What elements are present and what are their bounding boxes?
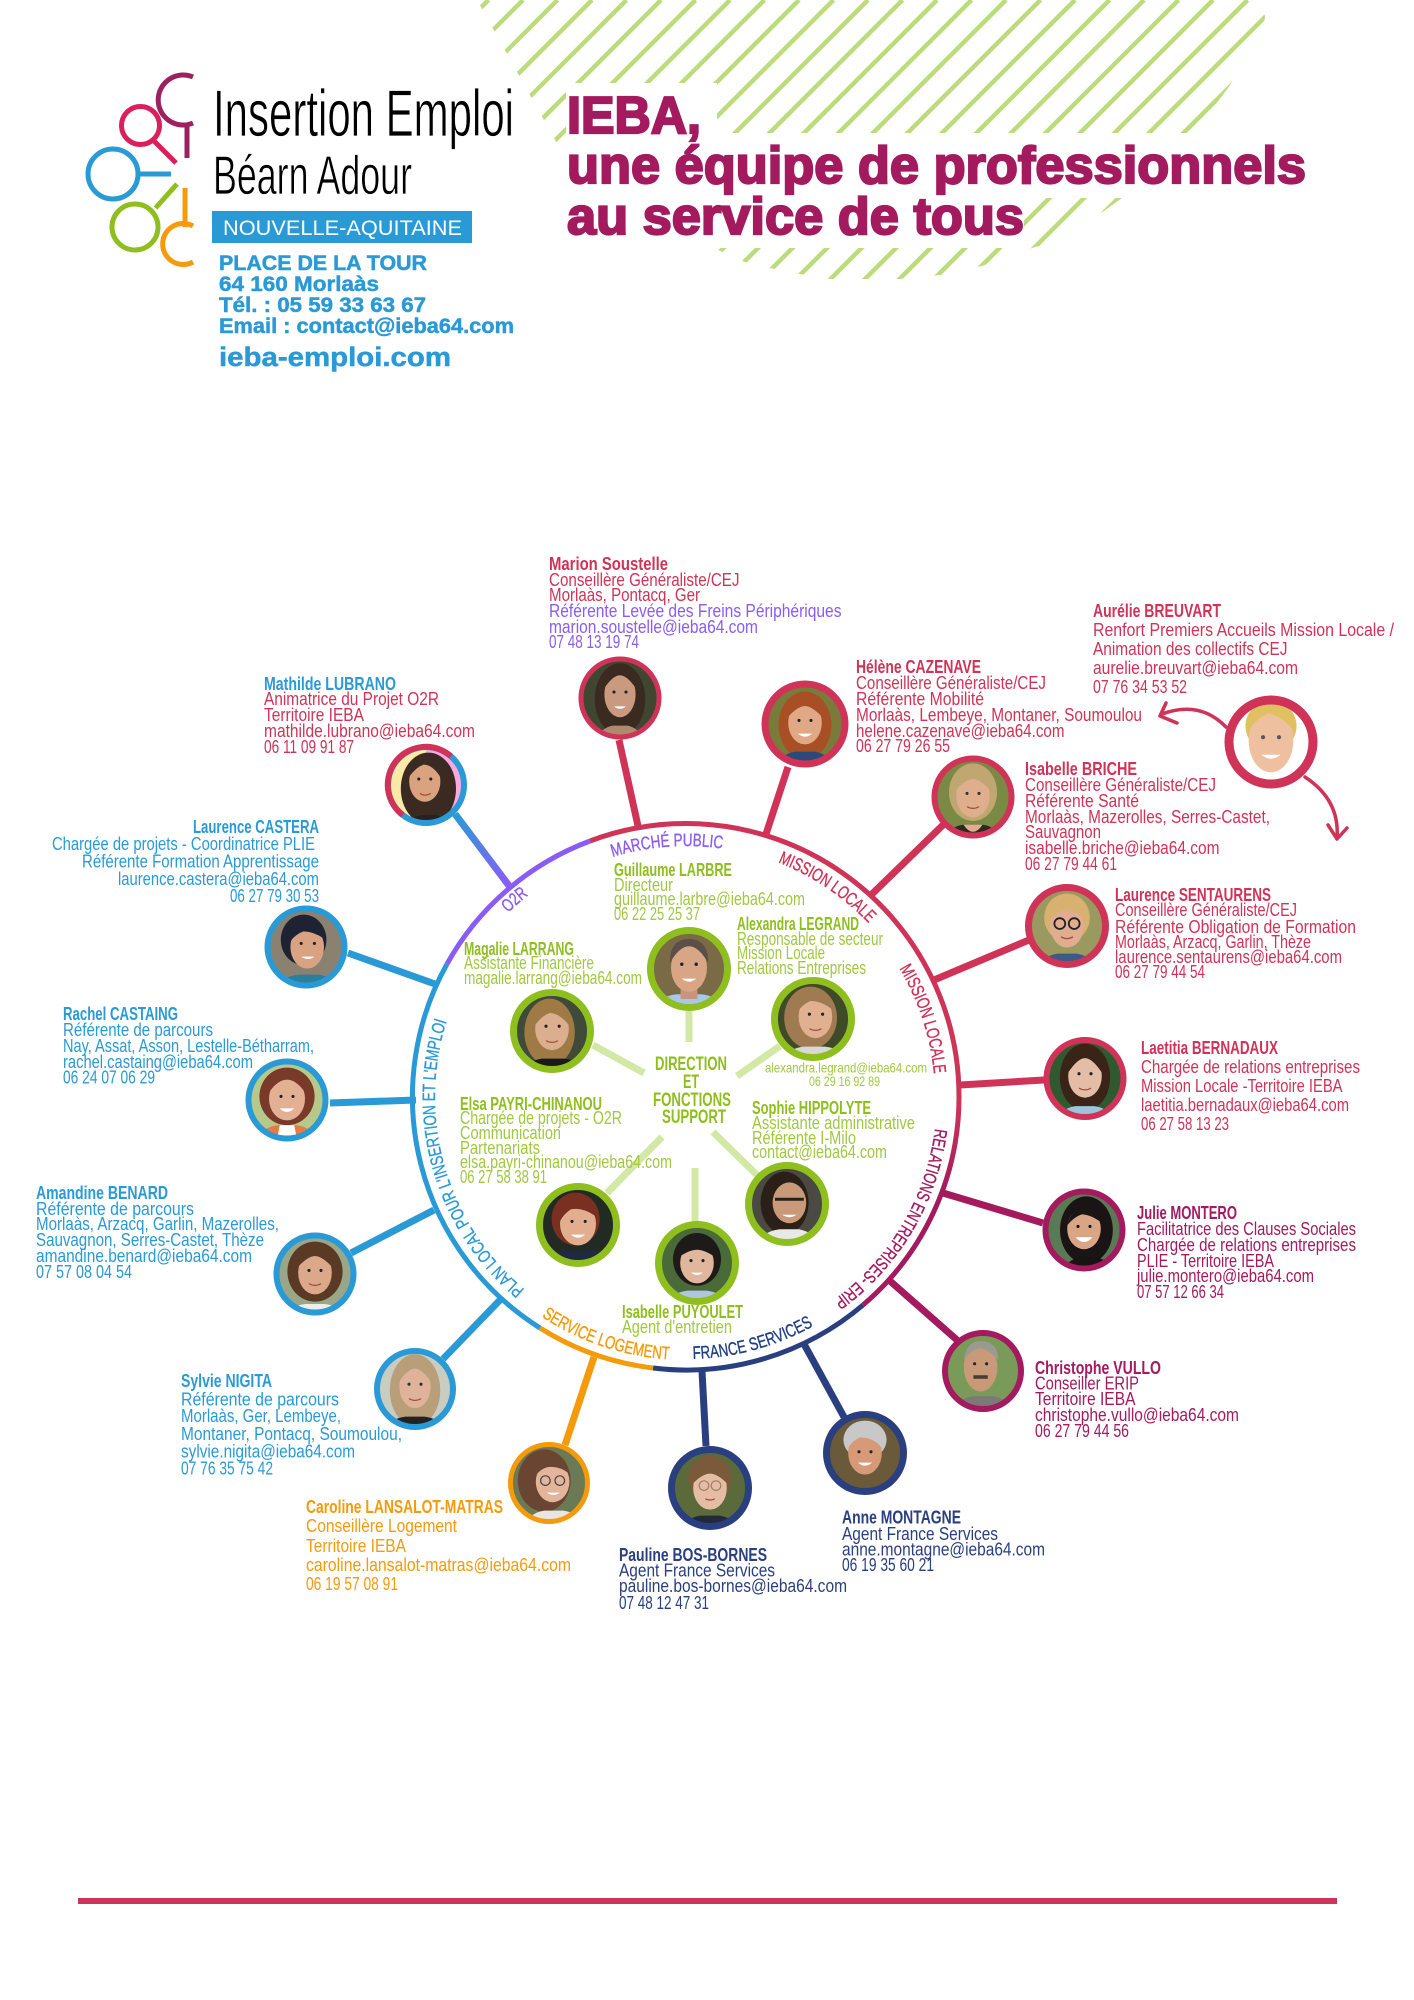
details: Laurence Sentaurens: Conseillère Généraliste/CEJ	[1115, 900, 1297, 920]
details: Julie Montero: julie.montero@ieba64.com	[1136, 1266, 1314, 1286]
photo: Amandine Benard	[274, 1232, 356, 1316]
details: Julie Montero: 07 57 12 66 34	[1137, 1282, 1224, 1302]
details: Isabelle Briche	[1025, 759, 1270, 874]
details: Marion Soustelle: Marion Soustelle	[549, 554, 668, 574]
details: Guillaume Larbre: guillaume.larbre@ieba64.com	[614, 889, 805, 909]
details: Alexandra Legrand	[737, 914, 927, 1089]
details: Isabelle Briche: Sauvagnon	[1025, 822, 1101, 842]
details: Laurence Castera: Laurence CASTERA	[193, 817, 319, 837]
details: Laurence Sentaurens	[1115, 885, 1356, 982]
details: Laetitia Bernadaux: Chargée de relations entreprises	[1141, 1057, 1360, 1077]
person: Rachel Castaing	[63, 1004, 335, 1149]
details: Elsa Payri-Chinanou: elsa.payri-chinanou@ieba64.com	[460, 1152, 672, 1172]
photo: Mathilde Lubrano	[384, 744, 467, 826]
details: Caroline Lansalot-Matras: caroline.lansalot-matras@ieba64.com	[306, 1555, 571, 1575]
photo: Sophie Hippolyte	[745, 1162, 829, 1246]
details: Guillaume Larbre: Directeur	[614, 875, 673, 895]
contact address: Email : contact@ieba64.com	[219, 315, 514, 338]
details: Elsa Payri-Chinanou: Chargée de projets - O2R	[460, 1108, 622, 1128]
details: Guillaume Larbre: Guillaume LARBRE	[614, 860, 732, 880]
details: Sophie Hippolyte: Référente I-Milo	[752, 1128, 856, 1148]
person: Caroline Lansalot-Matras	[306, 1436, 597, 1594]
details: Anne Montagne	[842, 1508, 1045, 1575]
details: Christophe Vullo: 06 27 79 44 56	[1035, 1421, 1129, 1441]
person: Amandine Benard	[36, 1183, 363, 1323]
details: Isabelle Briche: Isabelle BRICHE	[1025, 759, 1137, 779]
details: Laetitia Bernadaux: laetitia.bernadaux@ieba64.com	[1141, 1095, 1349, 1115]
details: Christophe Vullo: Christophe VULLO	[1035, 1358, 1161, 1378]
details: Isabelle Puyoulet: Isabelle PUYOULET	[622, 1302, 743, 1322]
person: Alexandra Legrand	[737, 914, 927, 1089]
title	[567, 87, 1306, 246]
details: Hélène Cazenave: Conseillère Généraliste/CEJ	[856, 673, 1046, 693]
details: Laetitia Bernadaux: Mission Locale -Territoire IEBA	[1141, 1076, 1342, 1096]
details: Isabelle Briche: Référente Santé	[1025, 791, 1139, 811]
title: IEBA,	[567, 87, 701, 145]
photo: Hélène Cazenave	[757, 677, 853, 773]
photo: Alexandra Legrand	[771, 977, 855, 1061]
details: Alexandra Legrand: alexandra.legrand@ieba64.com	[765, 1060, 927, 1076]
hub heading: direction et fonctions support: FONCTIONS	[653, 1090, 731, 1111]
details: Rachel Castaing: rachel.castaing@ieba64.com	[63, 1052, 253, 1072]
details: Magalie Larrang: Assistante Financière	[464, 953, 594, 973]
details: Anne Montagne: 06 19 35 60 21	[842, 1555, 934, 1575]
details: Pauline Bos-Bornes: Agent France Services	[619, 1560, 775, 1580]
person: Guillaume Larbre	[614, 860, 805, 1018]
details: Aurélie Breuvart: Aurélie BREUVART	[1093, 601, 1221, 621]
title: au service de tous	[567, 188, 1024, 246]
region badge	[212, 211, 472, 243]
details: Isabelle Briche: Conseillère Généraliste/CEJ	[1025, 775, 1216, 795]
details: Amandine Benard: amandine.benard@ieba64.com	[36, 1246, 252, 1266]
decorative green diagonal stripes	[480, 0, 1265, 279]
details: Mathilde Lubrano: mathilde.lubrano@ieba64.com	[264, 721, 475, 741]
person: Sylvie Nigita	[181, 1342, 463, 1478]
details: Caroline Lansalot-Matras: Caroline LANSALOT-MATRAS	[306, 1497, 503, 1517]
photo: Isabelle Briche	[932, 756, 1014, 838]
details: Aurélie Breuvart: 07 76 34 53 52	[1093, 677, 1187, 697]
person: Magalie Larrang	[464, 939, 642, 1080]
person: Hélène Cazenave	[757, 657, 1142, 773]
details: Hélène Cazenave	[856, 657, 1142, 756]
details: Hélène Cazenave: Référente Mobilité	[856, 689, 984, 709]
details: Sylvie Nigita: Sylvie NIGITA	[181, 1371, 272, 1391]
details: Rachel Castaing: Rachel CASTAING	[63, 1004, 178, 1024]
details: Laurence Castera: Chargée de projets - Coordinatrice PLIE	[52, 834, 315, 854]
details: Alexandra Legrand: 06 29 16 92 89	[809, 1073, 880, 1089]
details: Amandine Benard: Référente de parcours	[36, 1199, 194, 1219]
photo: Christophe Vullo	[942, 1330, 1024, 1412]
details: Isabelle Puyoulet: Agent d'entretien	[622, 1317, 732, 1337]
photo: Rachel Castaing	[246, 1058, 328, 1142]
details: Mathilde Lubrano: Territoire IEBA	[264, 705, 364, 725]
details: Elsa Payri-Chinanou: Elsa PAYRI-CHINANOU	[460, 1094, 602, 1114]
photo: Anne Montagne	[823, 1411, 907, 1495]
person: Isabelle Briche	[925, 750, 1270, 874]
details: Caroline Lansalot-Matras: Conseillère Logement	[306, 1516, 457, 1536]
region badge: NOUVELLE-AQUITAINE	[223, 217, 462, 240]
details: Christophe Vullo: christophe.vullo@ieba64.com	[1035, 1405, 1239, 1425]
photo: Laetitia Bernadaux	[1044, 1037, 1126, 1120]
person: Mathilde Lubrano	[264, 674, 475, 834]
details: Alexandra Legrand: Mission Locale	[737, 943, 825, 963]
photo: Sylvie Nigita	[374, 1348, 456, 1430]
details: Pauline Bos-Bornes	[619, 1545, 847, 1613]
person: Julie Montero	[1036, 1183, 1356, 1302]
details: Anne Montagne: Anne MONTAGNE	[842, 1508, 961, 1528]
logo wordmark	[213, 76, 514, 206]
person: Laetitia Bernadaux	[1044, 1037, 1360, 1130]
details: Sophie Hippolyte	[752, 1098, 915, 1162]
hub heading: direction et fonctions support: DIRECTION	[655, 1054, 727, 1075]
curved service labels	[422, 831, 948, 1360]
details: Elsa Payri-Chinanou: Partenariats	[460, 1138, 540, 1158]
person: Anne Montagne	[817, 1406, 1045, 1575]
hub heading: direction et fonctions support: SUPPORT	[662, 1107, 726, 1128]
details: Mathilde Lubrano	[264, 674, 475, 757]
details: Laurence Sentaurens: Référente Obligation de Formation	[1115, 917, 1356, 937]
arrow: Aurélie to Hélène	[1160, 703, 1226, 727]
logo wordmark: Insertion Emploi	[213, 76, 514, 150]
details: Anne Montagne: anne.montagne@ieba64.com	[842, 1540, 1045, 1560]
details: Hélène Cazenave: Morlaàs, Lembeye, Montaner, Soumoulou	[856, 705, 1142, 725]
details: Laurence Sentaurens: 06 27 79 44 54	[1115, 962, 1205, 982]
details: Christophe Vullo: Territoire IEBA	[1035, 1389, 1136, 1409]
details: Amandine Benard: 07 57 08 04 54	[36, 1262, 132, 1282]
details: Christophe Vullo	[1035, 1358, 1239, 1441]
details: Magalie Larrang	[464, 939, 642, 988]
details: Hélène Cazenave: helene.cazenave@ieba64.com	[856, 721, 1064, 741]
person: Isabelle Puyoulet	[622, 1216, 745, 1337]
details: Caroline Lansalot-Matras: Territoire IEBA	[306, 1536, 406, 1556]
details: Hélène Cazenave: 06 27 79 26 55	[856, 736, 950, 756]
details: Hélène Cazenave: Hélène CAZENAVE	[856, 657, 981, 677]
contact address	[219, 252, 514, 372]
details: Rachel Castaing: Référente de parcours	[63, 1020, 213, 1040]
photo: Pauline Bos-Bornes	[668, 1446, 752, 1530]
details: Pauline Bos-Bornes: pauline.bos-bornes@ieba64.com	[619, 1576, 847, 1596]
person: Laurence Sentaurens	[1025, 884, 1355, 978]
photo: Magalie Larrang	[510, 989, 594, 1073]
details: Marion Soustelle	[549, 554, 842, 652]
details: Amandine Benard	[36, 1183, 279, 1282]
photo: Julie Montero	[1042, 1188, 1126, 1272]
person: Elsa Payri-Chinanou	[460, 1094, 672, 1274]
details: Marion Soustelle: Référente Levée des Freins Périphériques	[549, 601, 842, 621]
details: Isabelle Puyoulet	[622, 1302, 743, 1337]
contact address: Tél. : 05 59 33 63 67	[219, 294, 426, 317]
details: Aurélie Breuvart: Animation des collectifs CEJ	[1093, 639, 1288, 659]
details: Mathilde Lubrano: Mathilde LUBRANO	[264, 674, 396, 694]
curved service labels: SERVICE LOGEMENT	[543, 1308, 670, 1360]
curved service labels: FRANCE SERVICES	[693, 1316, 812, 1359]
details: Sylvie Nigita: Morlaàs, Ger, Lembeye,	[181, 1406, 341, 1426]
details: Sylvie Nigita: 07 76 35 75 42	[181, 1458, 273, 1478]
details: Alexandra Legrand: Alexandra LEGRAND	[737, 914, 859, 934]
details: Laurence Castera	[52, 817, 319, 906]
photo: Marion Soustelle	[572, 651, 668, 747]
details: Laurence Castera: laurence.castera@ieba64.com	[118, 869, 319, 889]
details: Marion Soustelle: marion.soustelle@ieba64.com	[549, 617, 758, 637]
details: Isabelle Briche: Morlaàs, Mazerolles, Serres-Castet,	[1025, 807, 1270, 827]
person: Christophe Vullo	[942, 1330, 1238, 1437]
details: Sylvie Nigita	[181, 1371, 402, 1478]
central ring with service-coloured arcs	[412, 824, 959, 1370]
footer rule	[78, 1898, 1337, 1904]
details: Julie Montero	[1136, 1203, 1356, 1302]
person: Sophie Hippolyte	[739, 1098, 915, 1253]
logo: magnifying glasses	[88, 75, 193, 264]
curved service labels: MARCHÉ PUBLIC	[610, 831, 724, 857]
curved service labels: MISSION LOCALE	[778, 851, 878, 924]
title: une équipe de professionnels	[567, 137, 1306, 195]
curved service labels: PLAN LOCAL POUR L'INSERTION ET L'EMPLOI	[422, 1018, 524, 1298]
person: Laurence Castera	[52, 817, 354, 996]
details: Julie Montero: Facilitatrice des Clauses Sociales	[1137, 1219, 1356, 1239]
details: Alexandra Legrand: Relations Entreprises	[737, 958, 866, 978]
details: Caroline Lansalot-Matras	[306, 1497, 571, 1594]
details: Laurence Sentaurens: laurence.sentaurens@ieba64.com	[1115, 947, 1342, 967]
spokes from direction hub	[593, 1011, 780, 1221]
details: Sophie Hippolyte: Sophie HIPPOLYTE	[752, 1098, 871, 1118]
details: Isabelle Briche: isabelle.briche@ieba64.com	[1025, 838, 1220, 858]
details: Elsa Payri-Chinanou: 06 27 58 38 91	[460, 1167, 547, 1187]
person: Aurélie Breuvart	[1093, 601, 1394, 806]
logo wordmark: Béarn Adour	[213, 144, 412, 206]
details: Guillaume Larbre: 06 22 25 25 37	[614, 904, 700, 924]
person: Pauline Bos-Bornes	[619, 1441, 847, 1613]
details: Marion Soustelle: Morlaàs, Pontacq, Ger	[549, 585, 700, 605]
contact address: 64 160 Morlaàs	[219, 273, 379, 296]
details: Elsa Payri-Chinanou: Communication	[460, 1123, 561, 1143]
details: Elsa Payri-Chinanou	[460, 1094, 672, 1187]
details: Alexandra Legrand: Responsable de secteur	[737, 929, 883, 949]
details: Sylvie Nigita: sylvie.nigita@ieba64.com	[181, 1442, 355, 1462]
details: Aurélie Breuvart	[1093, 601, 1394, 697]
photo: Isabelle Puyoulet	[655, 1221, 739, 1305]
details: Sophie Hippolyte: Assistante administrative	[752, 1113, 915, 1133]
details: Rachel Castaing	[63, 1004, 314, 1088]
details: Rachel Castaing: Nay, Assat, Asson, Lestelle-Bétharram,	[63, 1036, 314, 1056]
details: Isabelle Briche: 06 27 79 44 61	[1025, 854, 1117, 874]
contact address: PLACE DE LA TOUR	[219, 252, 427, 275]
details: Amandine Benard: Sauvagnon, Serres-Castet, Thèze	[36, 1230, 264, 1250]
hub heading: direction et fonctions support: ET	[683, 1072, 699, 1093]
details: Sylvie Nigita: Montaner, Pontacq, Soumoulou,	[181, 1424, 402, 1444]
details: Laetitia Bernadaux: 06 27 58 13 23	[1141, 1114, 1229, 1134]
details: Sophie Hippolyte: contact@ieba64.com	[752, 1142, 887, 1162]
details: Mathilde Lubrano: Animatrice du Projet O2R	[264, 689, 439, 709]
details: Anne Montagne: Agent France Services	[842, 1524, 998, 1544]
details: Laurence Castera: 06 27 79 30 53	[230, 886, 319, 906]
details: Marion Soustelle: Conseillère Généraliste/CEJ	[549, 570, 740, 590]
arrow: Aurélie to Laurence Sentaurens	[1305, 777, 1347, 839]
connectors from ring to people	[330, 740, 1044, 1446]
photo: Laurence Castera	[264, 906, 348, 988]
details: Laurence Castera: Référente Formation Apprentissage	[82, 852, 319, 872]
photo: Caroline Lansalot-Matras	[508, 1442, 590, 1524]
details: Pauline Bos-Bornes: Pauline BOS-BORNES	[619, 1545, 767, 1565]
curved service labels: RELATIONS ENTREPRISES- ERIP	[838, 1129, 948, 1309]
hub heading: direction et fonctions support	[653, 1054, 731, 1128]
details: Aurélie Breuvart: aurelie.breuvart@ieba64.com	[1093, 658, 1298, 678]
details: Pauline Bos-Bornes: 07 48 12 47 31	[619, 1593, 709, 1613]
person: Marion Soustelle	[549, 554, 842, 747]
photo: Aurélie Breuvart	[1207, 678, 1335, 806]
photo: Guillaume Larbre	[647, 927, 731, 1011]
photo: Laurence Sentaurens	[1025, 884, 1109, 968]
details: Rachel Castaing: 06 24 07 06 29	[63, 1068, 155, 1088]
details: Laetitia Bernadaux	[1141, 1038, 1360, 1134]
details: Amandine Benard: Morlaàs, Arzacq, Garlin, Mazerolles,	[36, 1214, 279, 1234]
details: Magalie Larrang: Magalie LARRANG	[464, 939, 574, 959]
details: Caroline Lansalot-Matras: 06 19 57 08 91	[306, 1574, 398, 1594]
curved service labels: O2R	[502, 887, 528, 911]
photo: Elsa Payri-Chinanou	[536, 1183, 620, 1267]
details: Amandine Benard: Amandine BENARD	[36, 1183, 168, 1203]
details: Christophe Vullo: Conseiller ERIP	[1035, 1374, 1139, 1394]
details: Julie Montero: PLIE - Territoire IEBA	[1137, 1251, 1274, 1271]
details: Mathilde Lubrano: 06 11 09 91 87	[264, 737, 354, 757]
curved service labels: MISSION LOCALE	[900, 963, 946, 1074]
details: Sylvie Nigita: Référente de parcours	[181, 1390, 339, 1410]
details: Marion Soustelle: 07 48 13 19 74	[549, 632, 639, 652]
details: Julie Montero: Julie MONTERO	[1137, 1203, 1237, 1223]
details: Julie Montero: Chargée de relations entreprises	[1137, 1235, 1356, 1255]
details: Laurence Sentaurens: Morlaàs, Arzacq, Garlin, Thèze	[1115, 932, 1311, 952]
details: Magalie Larrang: magalie.larrang@ieba64.com	[464, 968, 642, 988]
contact address: ieba-emploi.com	[219, 342, 451, 372]
details: Laetitia Bernadaux: Laetitia BERNADAUX	[1141, 1038, 1278, 1058]
details: Laurence Sentaurens: Laurence SENTAURENS	[1115, 885, 1271, 905]
details: Guillaume Larbre	[614, 860, 805, 924]
